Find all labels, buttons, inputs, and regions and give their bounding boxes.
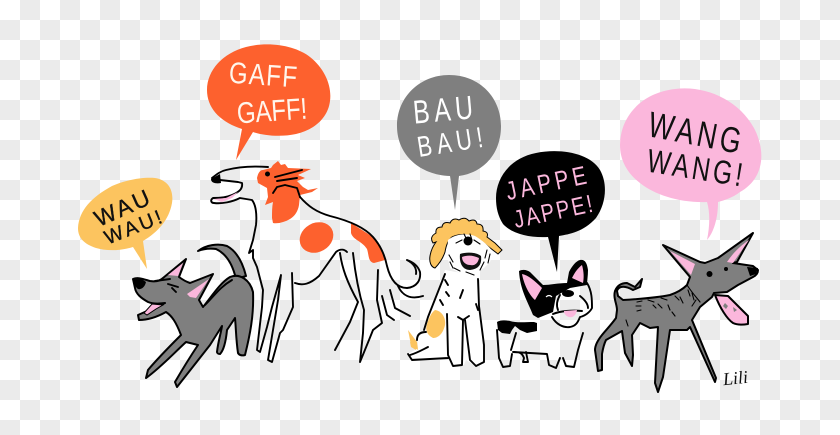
speech bubble: wau wau: WAU — [90, 184, 154, 232]
saluki eye — [265, 172, 270, 176]
bulldog tongue — [564, 310, 577, 317]
grey dog nose — [133, 278, 146, 289]
grey dog tail — [198, 245, 246, 279]
dog: french bulldog — [497, 260, 592, 368]
saluki tongue — [214, 192, 238, 202]
dog: shih tzu with yellow wig — [408, 218, 502, 366]
speech bubble: gaff gaff: GAFF! — [236, 91, 308, 130]
saluki outline — [211, 167, 423, 362]
speech bubble: wang wang: WANG — [645, 104, 745, 161]
shih tzu shaggy face — [447, 234, 493, 277]
hairless dog fur marks — [626, 285, 700, 326]
speech bubble: gaff gaff — [207, 44, 330, 160]
speech bubble: jappe jappe — [496, 151, 605, 272]
bulldog nose — [562, 290, 574, 297]
shih tzu white body — [408, 270, 484, 366]
shih tzu tail — [408, 330, 418, 350]
hairless dog mouth spots — [723, 303, 737, 312]
shih tzu outline — [408, 274, 484, 366]
dog: grey hairless dog — [595, 233, 758, 392]
bulldog eye arc — [546, 296, 552, 297]
shih tzu yellow leg patch — [426, 310, 445, 338]
artist signature: Lili — [721, 367, 749, 389]
dog: orange and white saluki — [211, 161, 423, 362]
saluki orange head patch and mane — [257, 161, 318, 223]
speech bubble: bau bau — [397, 75, 501, 210]
speech bubble: jappe jappe: JAPPE! — [511, 190, 595, 234]
shih tzu mouth — [460, 253, 481, 270]
speech bubble: gaff gaff: GAFF — [228, 55, 298, 94]
shih tzu nose — [464, 236, 472, 246]
bulldog outline — [497, 283, 592, 368]
speech bubble: bau bau: BAU! — [415, 122, 485, 164]
dog: grey dog barking — [133, 245, 253, 387]
speech bubble: wang wang: WANG! — [644, 143, 745, 194]
shih tzu fur marks — [449, 234, 490, 275]
bulldog black ears and mask — [519, 260, 588, 318]
speech bubble: wau wau: WAU! — [101, 206, 165, 249]
hairless dog open mouth — [715, 295, 748, 325]
saluki orange side spot — [294, 216, 339, 259]
bulldog mouth — [553, 295, 588, 314]
hairless dog body — [595, 233, 758, 392]
hairless dog ears — [670, 240, 749, 275]
bulldog pink ears — [522, 265, 584, 300]
bulldog back patch — [497, 320, 537, 334]
saluki orange back spot — [351, 223, 385, 263]
speech bubble: jappe jappe: JAPPE — [503, 161, 589, 206]
saluki nose — [211, 174, 221, 183]
speech bubble: wang wang — [620, 88, 761, 240]
shih tzu yellow wig with scallops — [430, 218, 502, 268]
hairless dog eyes — [706, 271, 712, 277]
speech bubble: wau wau — [78, 178, 172, 269]
speech bubble: bau bau: BAU — [412, 90, 475, 131]
grey dog body — [133, 259, 253, 387]
grey dog ears — [168, 263, 209, 298]
grey dog mouth — [144, 304, 163, 315]
hairless dog nose — [747, 267, 758, 276]
